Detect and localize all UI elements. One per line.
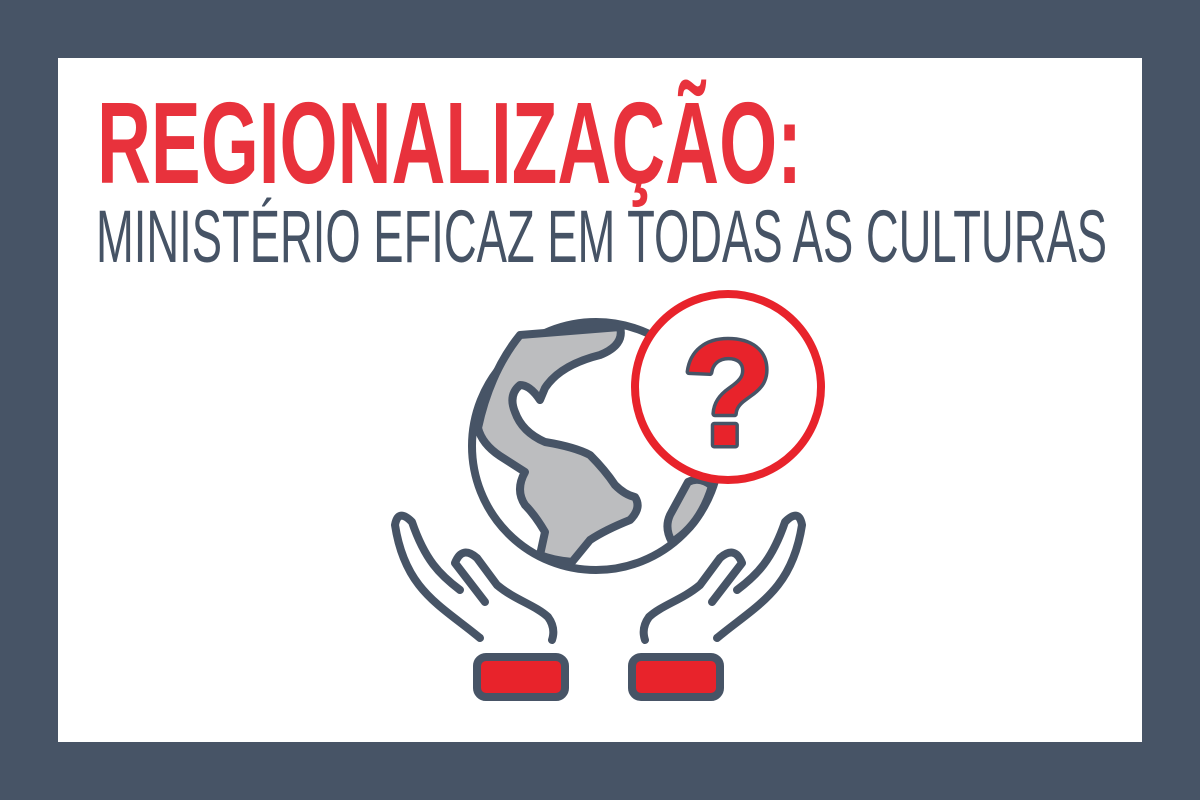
title: REGIONALIZAÇÃO: (97, 78, 802, 208)
callout: question circle: ? (682, 309, 774, 477)
icon: globe held by hands with question mark (395, 294, 821, 697)
globe (472, 322, 720, 570)
callout: question circle (635, 294, 821, 480)
icon: right hand (632, 516, 802, 697)
white panel (58, 58, 1142, 742)
icon: left hand (395, 516, 565, 697)
